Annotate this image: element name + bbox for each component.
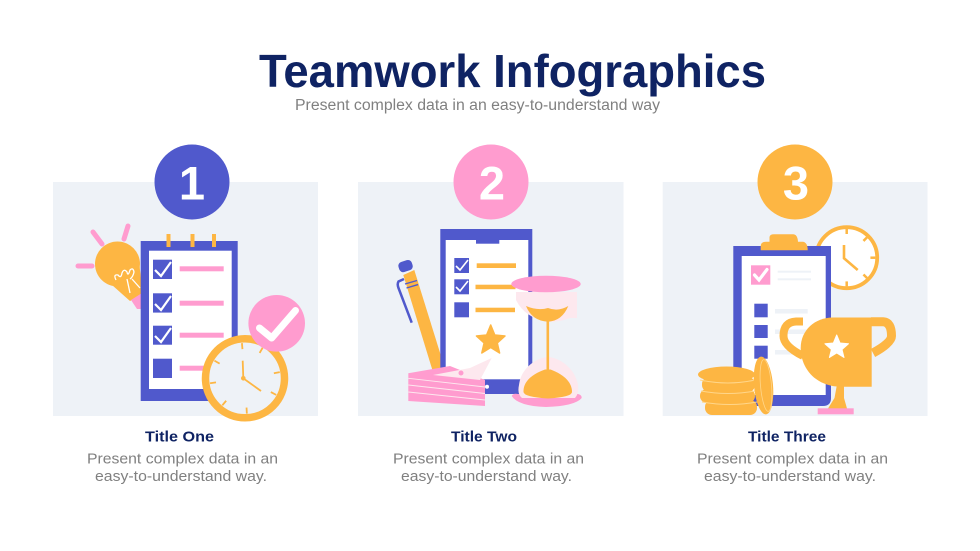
- number badge 1: [154, 144, 230, 220]
- number badge 2: [454, 144, 528, 220]
- icon: trophy: [784, 318, 892, 414]
- icon: clipboard: [733, 234, 831, 406]
- icon: pink check badge: [248, 295, 305, 352]
- text block: description one: Present complex data in an: [87, 450, 278, 468]
- panel: step one: [53, 144, 318, 485]
- icon: wall clock: [816, 227, 877, 288]
- panel background: [358, 182, 624, 416]
- icon: coins: [698, 356, 775, 415]
- text block: description two: easy-to-understand way.: [401, 468, 572, 485]
- icon: pen: [397, 259, 446, 372]
- icon: phone checklist: [440, 229, 532, 394]
- number badge 3: [758, 144, 832, 220]
- heading: title one: Title One: [145, 428, 214, 446]
- heading: title three: Title Three: [748, 428, 826, 446]
- number badge 3: 3: [783, 156, 809, 210]
- text block: description one: easy-to-understand way.: [95, 468, 267, 485]
- number badge 2: 2: [479, 156, 505, 210]
- subtitle: Present complex data in an easy-to-understand way: [295, 97, 660, 114]
- text block: description one: [87, 450, 278, 485]
- text block: description three: easy-to-understand way.: [704, 468, 876, 485]
- panel: step three: [663, 144, 928, 485]
- text block: description two: [393, 450, 584, 485]
- icon: checklist notepad: [141, 234, 238, 401]
- title: Teamwork Infographics: [259, 45, 766, 97]
- text block: description three: [697, 450, 888, 485]
- icon: paper stack: [408, 358, 492, 406]
- icon: light bulb: [78, 226, 143, 309]
- panel background: [663, 182, 928, 416]
- icon: clock: [206, 339, 284, 418]
- heading: title two: Title Two: [451, 428, 517, 446]
- panel background: [53, 182, 318, 416]
- text block: description three: Present complex data in an: [697, 450, 888, 468]
- text block: description two: Present complex data in an: [393, 450, 584, 468]
- icon: hourglass: [511, 276, 582, 407]
- panel: step two: [358, 144, 624, 485]
- number badge 1: 1: [179, 156, 205, 210]
